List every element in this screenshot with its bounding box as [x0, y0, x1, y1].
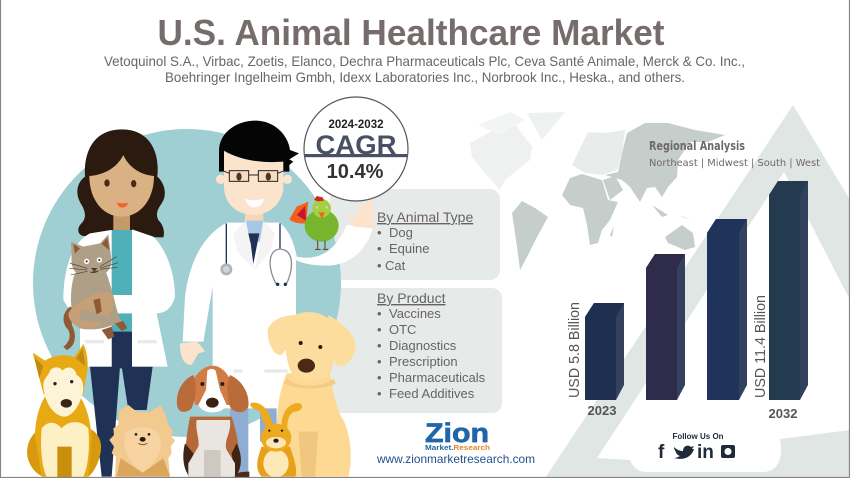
text: by product: Prescription — [389, 354, 458, 369]
bar 3 — [707, 219, 747, 400]
dog: husky — [27, 344, 101, 477]
card: by product background — [330, 288, 502, 413]
text: by product: Vaccines — [389, 306, 441, 321]
text: by product: • — [377, 354, 382, 369]
subtitle: companies: Vetoquinol S.A., Virbac, Zoetis, Elanco, Dechra Pharmaceuticals Plc, Ceva Santé Animale, Merck & Co. Inc., — [104, 53, 745, 69]
text: by product: By Product — [377, 290, 446, 306]
label: 2032: 2032 — [769, 406, 797, 421]
logo: Zion Market Research: Market. Research — [425, 443, 490, 452]
logo: Zion Market Research: Zion — [425, 418, 489, 448]
woman vet — [63, 129, 175, 477]
text: by product — [377, 290, 486, 401]
text: by product: • — [377, 338, 382, 353]
bar 2 — [646, 254, 685, 400]
bar 2032 — [769, 181, 808, 400]
text: by animal type: Cat — [385, 258, 406, 273]
subtitle: companies: Boehringer Ingelheim Gmbh, Idexx Laboratories Inc., Norbrook Inc., Heska., and others. — [165, 69, 685, 85]
card: by animal type background — [330, 189, 500, 280]
social: follow us on: f — [658, 442, 665, 463]
text: by animal type: • — [377, 241, 382, 256]
text: by product: • — [377, 322, 382, 337]
text: by product: Diagnostics — [389, 338, 457, 353]
text: by animal type — [377, 209, 473, 273]
CAGR badge: 2024-2032 — [328, 119, 384, 131]
background triangle — [545, 105, 850, 478]
text: by animal type: • — [377, 225, 382, 240]
rabbit — [250, 403, 302, 477]
social: follow us on: in — [697, 442, 714, 463]
social: follow us on — [658, 432, 735, 463]
subtitle: companies — [104, 53, 745, 85]
text: by product: • — [377, 386, 382, 401]
text: by product: Feed Additives — [389, 386, 475, 401]
regional analysis: Regional Analysis — [649, 139, 745, 153]
world map — [470, 112, 725, 270]
CAGR badge — [304, 97, 408, 201]
male vet — [180, 121, 373, 477]
bar chart — [566, 181, 808, 421]
text: by animal type: Equine — [389, 241, 429, 256]
text: by product: • — [377, 306, 382, 321]
social: follow us on: Follow Us On — [672, 432, 724, 441]
dog: labrador — [268, 312, 355, 477]
bar 2023 — [585, 303, 624, 400]
regional analysis — [649, 139, 820, 169]
cat — [63, 234, 127, 350]
dog: beagle — [177, 366, 249, 477]
title: U.S. Animal Healthcare Market — [158, 12, 665, 53]
teal circle — [33, 129, 341, 437]
text: by product: Pharmaceuticals — [389, 370, 486, 385]
text: by animal type: Dog — [389, 225, 413, 240]
logo: Zion Market Research: www.zionmarketresearch.com — [376, 452, 535, 466]
parrot — [289, 196, 339, 249]
label: USD 11.4 Billion: USD 11.4 Billion — [752, 295, 769, 398]
text: by animal type: • — [377, 258, 382, 273]
CAGR badge: CAGR — [316, 130, 396, 160]
label: 2023: 2023 — [588, 403, 616, 418]
text: by animal type: By Animal Type — [377, 209, 473, 225]
icon: stethoscope — [222, 223, 291, 286]
CAGR badge: 10.4% — [327, 161, 384, 183]
text: by product: • — [377, 370, 382, 385]
text: by product: OTC — [389, 322, 416, 337]
logo: Zion Market Research — [376, 418, 535, 466]
illustration: vets and animals — [27, 121, 373, 477]
dog: pomeranian — [109, 405, 175, 477]
label: USD 5.8 Billion: USD 5.8 Billion — [566, 302, 583, 398]
regional analysis: Northeast | Midwest | South | West — [649, 158, 820, 169]
